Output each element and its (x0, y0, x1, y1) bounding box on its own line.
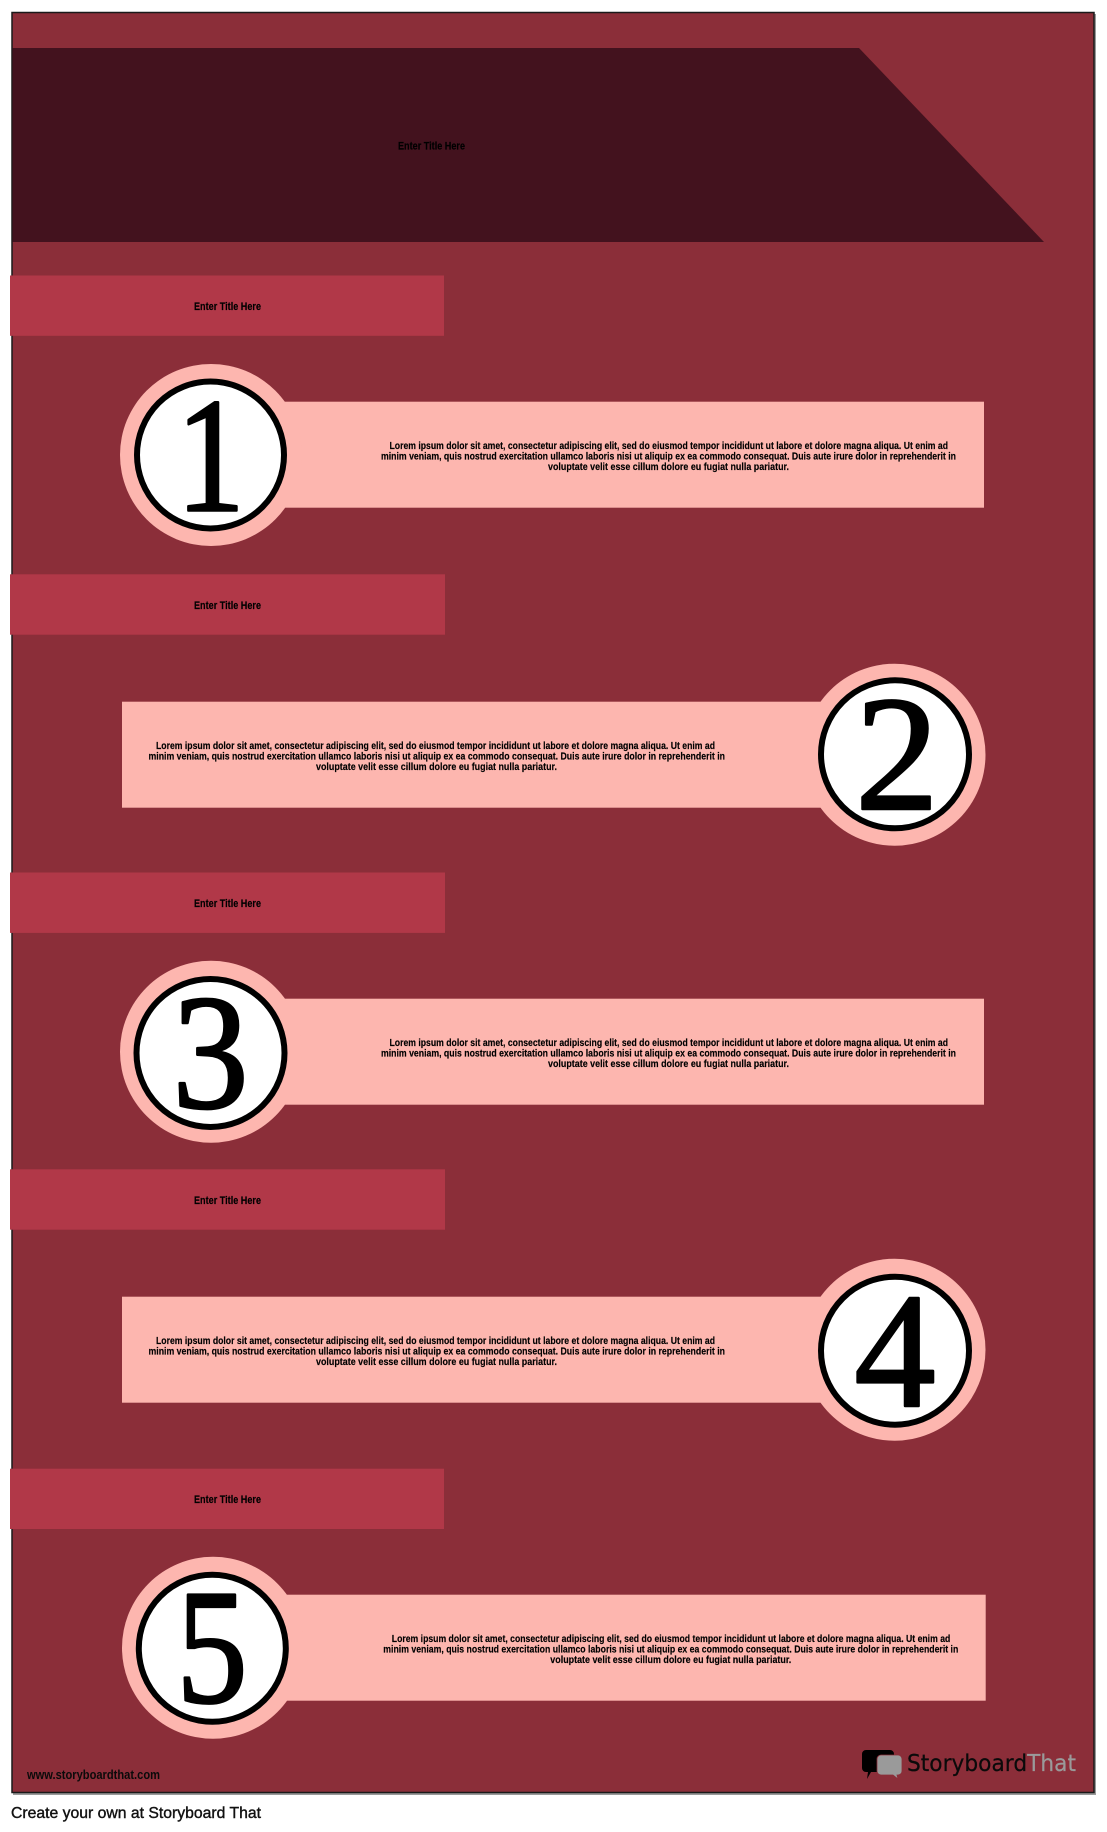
number 2: 2 (855, 662, 939, 845)
step 5 text (383, 1633, 958, 1666)
heading bar 3 (10, 872, 445, 933)
step 3 text (381, 1037, 956, 1070)
number 4: 4 (854, 1261, 936, 1442)
logo: Storyboard That (862, 1750, 1076, 1779)
heading bar 2 (10, 574, 445, 635)
step 5 text: Lorem ipsum dolor sit amet, consectetur adipiscing elit, sed do eiusmod tempor incididunt ut labore et dolore magna aliqua. Ut enim ad (392, 1633, 950, 1645)
step 4 text: Lorem ipsum dolor sit amet, consectetur adipiscing elit, sed do eiusmod tempor incididunt ut labore et dolore magna aliqua. Ut enim ad (156, 1335, 715, 1347)
heading bar 1: Enter Title Here (194, 301, 261, 313)
step 5 (122, 1557, 986, 1739)
number 3: 3 (172, 963, 249, 1144)
heading bar 2: Enter Title Here (194, 600, 261, 612)
step 1 text: voluptate velit esse cillum dolore eu fugiat nulla pariatur. (548, 461, 789, 473)
footer caption: Create your own at Storyboard That (11, 1805, 262, 1822)
step 1 text: minim veniam, quis nostrud exercitation ullamco laboris nisi ut aliquip ex ea commodo consequat. Duis aute irure dolor in reprehenderit in (381, 450, 956, 462)
step 2 text: minim veniam, quis nostrud exercitation ullamco laboris nisi ut aliquip ex ea commodo consequat. Duis aute irure dolor in reprehenderit in (148, 750, 725, 762)
step 1 text: Lorem ipsum dolor sit amet, consectetur adipiscing elit, sed do eiusmod tempor incididunt ut labore et dolore magna aliqua. Ut enim ad (390, 440, 948, 452)
icon: speech bubbles (862, 1750, 902, 1779)
step 4 text: minim veniam, quis nostrud exercitation ullamco laboris nisi ut aliquip ex ea commodo consequat. Duis aute irure dolor in reprehenderit in (148, 1346, 725, 1358)
step 2 (122, 662, 986, 846)
step 4 (122, 1259, 986, 1442)
title banner: Enter Title Here (398, 140, 465, 152)
step 3 text: voluptate velit esse cillum dolore eu fugiat nulla pariatur. (548, 1058, 789, 1070)
heading bar 3: Enter Title Here (194, 898, 261, 910)
step 2 text: voluptate velit esse cillum dolore eu fugiat nulla pariatur. (316, 761, 557, 773)
heading bar 4: Enter Title Here (194, 1195, 261, 1207)
heading bar 5 (10, 1469, 444, 1529)
number 5: 5 (176, 1557, 248, 1738)
step 1 text (381, 440, 956, 473)
step 4 text: voluptate velit esse cillum dolore eu fugiat nulla pariatur. (316, 1356, 557, 1368)
heading bar 4 (10, 1169, 445, 1230)
step 5 text: minim veniam, quis nostrud exercitation ullamco laboris nisi ut aliquip ex ea commodo consequat. Duis aute irure dolor in reprehenderit in (383, 1644, 958, 1656)
step 2 text (148, 740, 725, 773)
number 1: 1 (176, 364, 245, 546)
step 1 (120, 364, 984, 546)
step 5 text: voluptate velit esse cillum dolore eu fugiat nulla pariatur. (550, 1654, 791, 1666)
step 3 text: Lorem ipsum dolor sit amet, consectetur adipiscing elit, sed do eiusmod tempor incididunt ut labore et dolore magna aliqua. Ut enim ad (390, 1037, 948, 1049)
heading bar 1 (10, 276, 444, 336)
step 3 text: minim veniam, quis nostrud exercitation ullamco laboris nisi ut aliquip ex ea commodo consequat. Duis aute irure dolor in reprehenderit in (381, 1048, 956, 1060)
step 4 text (148, 1335, 725, 1368)
step 2 text: Lorem ipsum dolor sit amet, consectetur adipiscing elit, sed do eiusmod tempor incididunt ut labore et dolore magna aliqua. Ut enim ad (156, 740, 715, 752)
logo wordmark: StoryboardThat (907, 1751, 1076, 1777)
step 3 (120, 961, 984, 1144)
title banner (12, 48, 1044, 242)
heading bar 5: Enter Title Here (194, 1494, 261, 1506)
website url: www.storyboardthat.com (26, 1767, 160, 1782)
